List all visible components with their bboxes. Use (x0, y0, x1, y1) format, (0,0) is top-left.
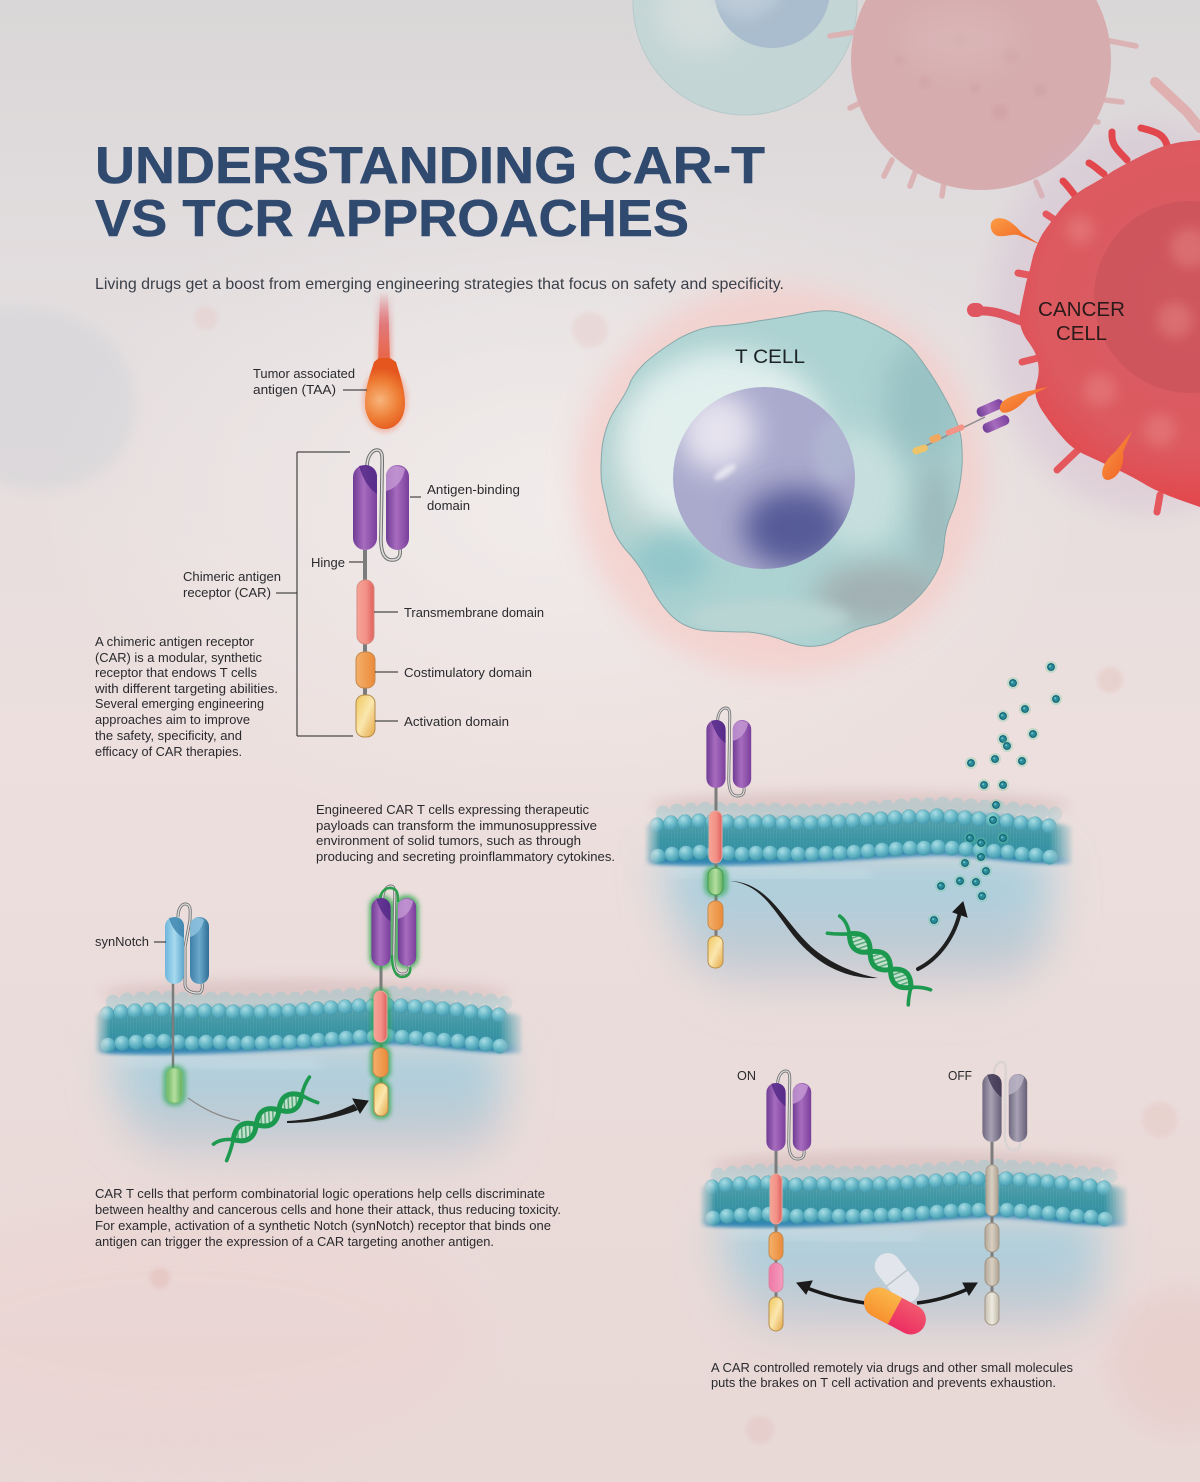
labels: on and off: ON (737, 1068, 756, 1083)
label: TAA (253, 366, 367, 397)
label: cancer cell (1038, 299, 1125, 345)
text: CAR description (94, 634, 278, 759)
CAR with green outline (369, 886, 419, 1119)
synNotch receptor (163, 904, 209, 1106)
text: payload description: Engineered CAR T cells expressing therapeutic (316, 802, 589, 817)
label: cancer cell: CELL (1056, 323, 1107, 345)
CAR labels: Antigen-binding (427, 482, 520, 497)
icon: tumor associated antigen (362, 292, 408, 433)
text: logic description (95, 1186, 561, 1249)
subtitle: Living drugs get a boost from emerging engineering strategies that focus on safety and specificity. (95, 276, 784, 293)
T cell (590, 300, 970, 650)
text: CAR description: receptor that endows T cells (95, 665, 257, 680)
arrow: expression (188, 1098, 368, 1123)
text: CAR description: with different targeting abilities. (94, 681, 278, 696)
icon: DNA (825, 913, 931, 1009)
CAR diagram (276, 450, 421, 737)
panel: cytokine payload (316, 661, 1073, 1009)
text: logic description: CAR T cells that perform combinatorial logic operations help cells discriminate (95, 1186, 545, 1201)
label: cancer cell: CANCER (1038, 299, 1125, 321)
membrane (645, 797, 1073, 864)
text: logic description: antigen can trigger the expression of a CAR targeting another antigen. (95, 1234, 494, 1249)
text: remote control description: A CAR controlled remotely via drugs and other small molecules (711, 1360, 1073, 1375)
text: logic description: For example, activation of a synthetic Notch (synNotch) receptor that binds one (95, 1218, 551, 1233)
text: payload description: environment of solid tumors, such as through (316, 833, 581, 848)
text: remote control description: puts the brakes on T cell activation and prevents exhaustion. (711, 1375, 1056, 1390)
text: CAR description: A chimeric antigen receptor (95, 634, 255, 649)
CAR labels (183, 482, 544, 729)
CAR labels: Hinge (311, 555, 345, 570)
icon: antigen upper left on cancer cell (991, 218, 1041, 245)
CAR: off (982, 1062, 1027, 1325)
icon: antigen lower on cancer cell (1102, 431, 1132, 480)
title: VS TCR APPROACHES (95, 190, 689, 248)
label: T cell: T CELL (735, 347, 805, 368)
text: remote control description (711, 1360, 1073, 1390)
CAR labels: Chimeric antigen (183, 569, 281, 584)
text: payload description (316, 802, 615, 864)
ghost cell: blue top (633, 0, 857, 115)
title (95, 137, 765, 248)
CAR labels: Activation domain (404, 714, 509, 729)
title: UNDERSTANDING CAR-T (95, 137, 765, 195)
CAR docked on cancer cell (911, 387, 1048, 455)
nucleus (673, 387, 855, 569)
CAR labels: domain (427, 498, 470, 513)
text: CAR description: efficacy of CAR therapies. (95, 744, 242, 759)
label: TAA: antigen (TAA) (253, 382, 336, 397)
text: payload description: producing and secreting proinflammatory cytokines. (316, 849, 615, 864)
arrows: drug to CAR (797, 1281, 977, 1303)
membrane (95, 986, 523, 1053)
ghost cell: pink top (830, 0, 1200, 196)
CAR labels: receptor (CAR) (183, 585, 271, 600)
icon: DNA (211, 1077, 324, 1163)
CAR labels: Transmembrane domain (404, 605, 544, 620)
cancer cell (974, 125, 1200, 515)
cytokine dots (928, 661, 1062, 926)
panel: synNotch logic (95, 886, 561, 1249)
CAR labels: Costimulatory domain (404, 665, 532, 680)
icon: pills (859, 1248, 931, 1340)
CAR: on (766, 1071, 811, 1331)
label: TAA: Tumor associated (253, 366, 355, 381)
labels: on and off (737, 1068, 972, 1083)
text: CAR description: the safety, specificity, and (95, 728, 242, 743)
text: CAR description: Several emerging engineering (95, 696, 264, 711)
ghost cell: grey left (0, 305, 136, 490)
text: logic description: between healthy and cancerous cells and hone their attack, thus reducing toxicity. (95, 1202, 561, 1217)
membrane (700, 1159, 1128, 1226)
text: payload description: payloads can transform the immunosuppressive (316, 818, 597, 833)
text: CAR description: approaches aim to improve (95, 712, 250, 727)
CAR with green domain (704, 708, 751, 968)
labels: on and off: OFF (948, 1068, 972, 1083)
panel: remote control (700, 1062, 1128, 1390)
arrow: gene expression (730, 881, 967, 978)
label: synNotch: synNotch (95, 934, 149, 949)
text: CAR description: (CAR) is a modular, synthetic (95, 650, 262, 665)
